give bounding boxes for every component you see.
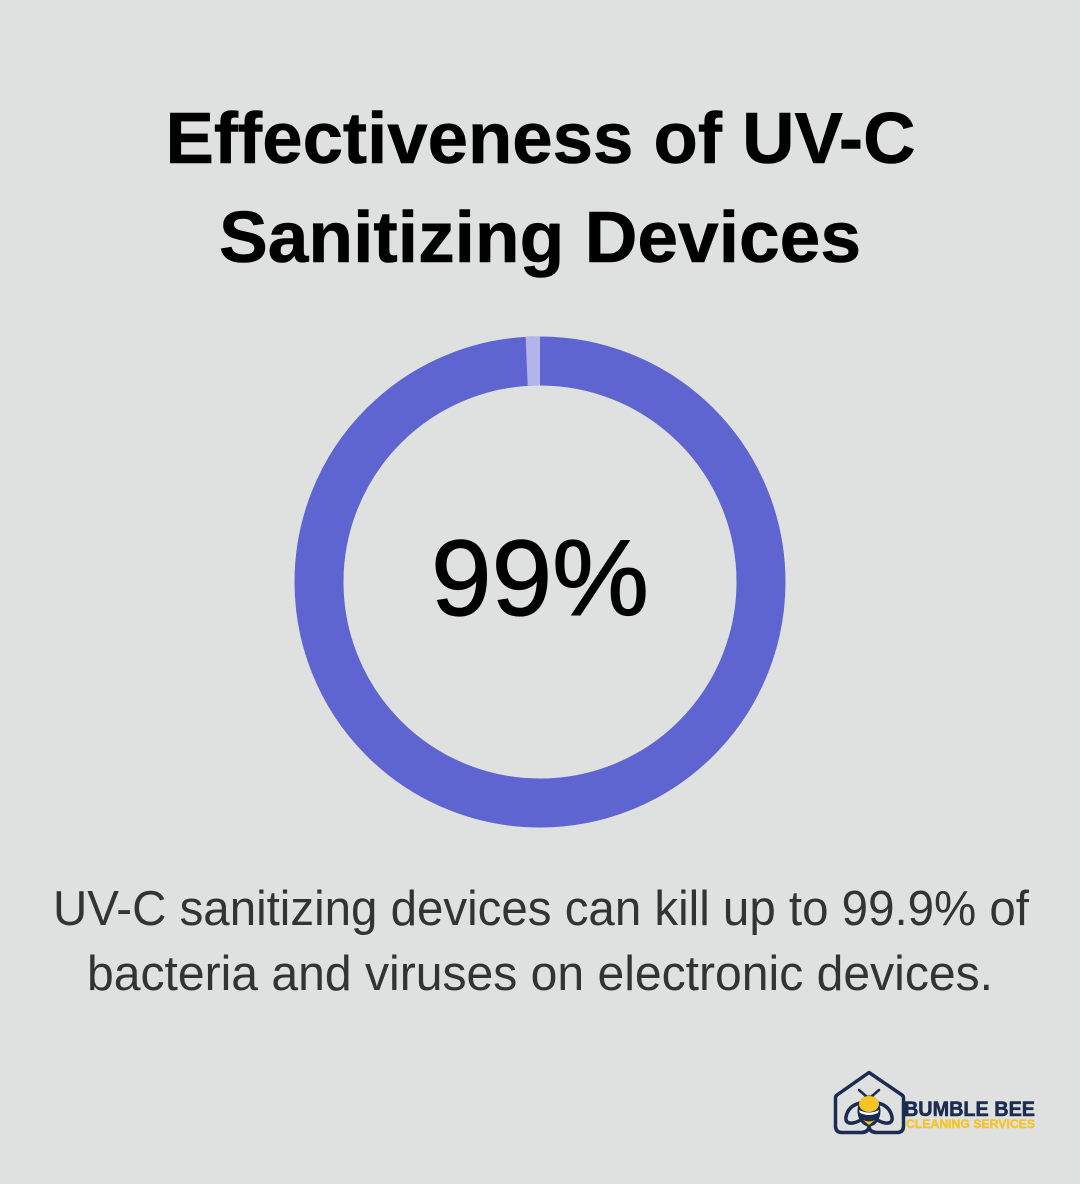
description text: bacteria and viruses on electronic devices.	[87, 947, 993, 1001]
remaining 1% segment	[526, 336, 540, 386]
description text	[53, 882, 1029, 1001]
logo tagline: CLEANING SERVICES	[906, 1117, 1035, 1131]
title	[166, 99, 916, 278]
title: Sanitizing Devices	[219, 198, 861, 278]
logo wordmark: BUMBLE BEE	[904, 1098, 1035, 1121]
center value: 99%	[431, 517, 649, 638]
donut chart: 99%	[319, 336, 761, 803]
logo: Bumble Bee Cleaning Services	[836, 1072, 1035, 1132]
description text: UV-C sanitizing devices can kill up to 99.9% of	[53, 882, 1029, 936]
title: Effectiveness of UV-C	[166, 99, 916, 179]
icon: house with bee	[836, 1072, 904, 1132]
